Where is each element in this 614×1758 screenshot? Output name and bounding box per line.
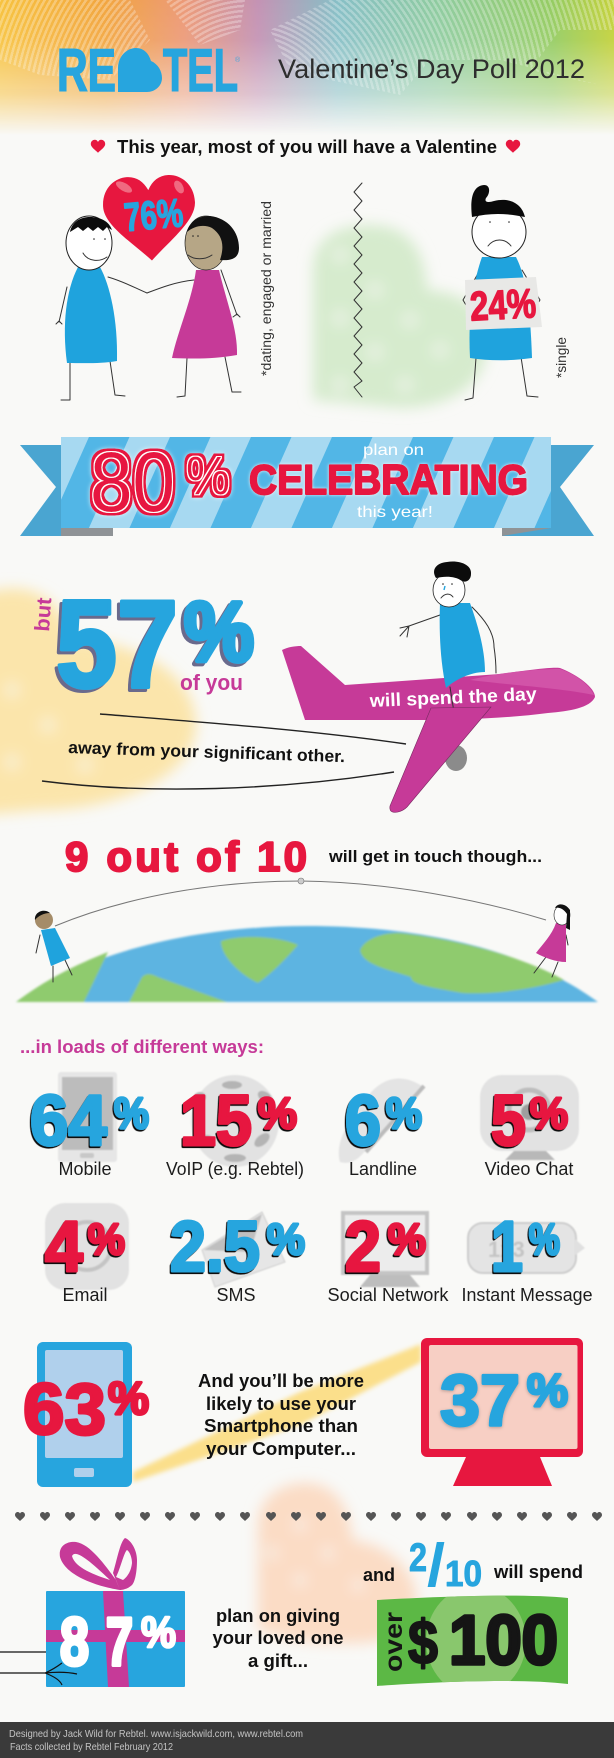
heart dotted divider: [15, 1512, 602, 1521]
wing: [390, 707, 491, 812]
heart with 76%: [102, 174, 198, 263]
stat: sms: 2.5: [170, 1208, 260, 1287]
icon: film reel: [191, 1075, 279, 1167]
smartphone with 63%: [23, 1342, 149, 1487]
87%: 7: [106, 1604, 133, 1680]
but: but: [31, 597, 56, 632]
globe: [16, 926, 598, 1002]
note: dating, engaged or married: *dating, engaged or married: [259, 201, 274, 376]
Rebtel logo: [57, 37, 241, 104]
stat: sms: [170, 1208, 305, 1305]
smartphone vs computer text: Smartphone than: [204, 1415, 358, 1436]
right small person: [534, 904, 570, 977]
sad single man with 24% sign: [463, 185, 542, 400]
57%: [56, 576, 254, 714]
stat: landline: %: [386, 1089, 422, 1138]
stat: landline: [339, 1078, 424, 1179]
yellow beam between phone and computer: [133, 1344, 421, 1482]
stat: social network: [328, 1208, 450, 1305]
banknote over $100: over: [380, 1612, 408, 1672]
stat: video chat: %: [530, 1089, 568, 1138]
Rebtel logo: RE: [57, 37, 116, 104]
stat: voip: 15: [180, 1082, 252, 1161]
computer with 37%: [421, 1338, 583, 1486]
stat: email: [45, 1203, 129, 1305]
gift with 87%: [0, 1538, 185, 1687]
smartphone with 63%: 63: [23, 1370, 106, 1450]
away from your significant other: away from your significant other.: [68, 738, 345, 766]
will spend the day: will spend the day: [368, 683, 538, 711]
80%: [90, 435, 230, 529]
computer with 37%: 37: [440, 1361, 520, 1441]
stat: voip: %: [258, 1089, 297, 1138]
smartphone vs computer text: And you’ll be more: [198, 1370, 364, 1391]
man: [400, 562, 496, 725]
icon: phone: [58, 1072, 117, 1162]
header rainbow background: [0, 0, 614, 135]
box: [46, 1591, 185, 1687]
and 2/10 will spend: will spend: [493, 1561, 583, 1582]
stat: email: 4: [45, 1208, 83, 1287]
section heading with hearts: This year, most of you will have a Valentine: [117, 137, 497, 157]
motion lines: [42, 714, 406, 789]
tin-can string between people: [55, 878, 546, 926]
footer: Facts collected by Rebtel February 2012: [10, 1741, 173, 1753]
fuselage: [282, 646, 595, 720]
peach blurred heart: [258, 1483, 417, 1643]
yellow blurred heart: [0, 589, 196, 815]
stat: email: Email: [62, 1285, 108, 1305]
icon: monitor: [341, 1211, 429, 1287]
stat: social network: %: [388, 1215, 426, 1264]
banner: 80% plan on celebrating: [20, 435, 594, 536]
Rebtel logo: ®: [235, 56, 241, 64]
left small person: [35, 911, 72, 982]
this year: this year!: [357, 504, 433, 521]
banknote over $100: $: [408, 1609, 438, 1678]
stat: voip: VoIP (e.g. Rebtel): [166, 1159, 304, 1179]
smartphone vs computer text: [198, 1370, 364, 1459]
plan on giving text: a gift...: [248, 1650, 308, 1671]
87%: [60, 1604, 176, 1680]
plan on giving text: plan on giving: [216, 1605, 340, 1626]
man: [56, 216, 147, 400]
smartphone vs computer text: your Computer...: [206, 1438, 356, 1459]
of you: of you: [180, 670, 243, 695]
stat: mobile: Mobile: [58, 1159, 112, 1179]
icon: speech bubble: 1x3: [488, 1237, 525, 1262]
57%: %: [184, 585, 254, 679]
stat: mobile: 64: [30, 1082, 107, 1161]
note: single: *single: [554, 337, 569, 378]
icon: webcam: [480, 1075, 579, 1160]
stat: landline: 6: [345, 1082, 381, 1161]
stat: mobile: %: [114, 1089, 149, 1138]
couple illustration: [56, 174, 241, 400]
ribbon tails: [20, 445, 594, 536]
stat: social network: Social Network: [328, 1285, 450, 1305]
stat: voip: [166, 1075, 304, 1179]
80%: 80: [90, 435, 175, 529]
green blurred heart: [313, 225, 487, 408]
and 2/10 will spend: /: [427, 1532, 445, 1599]
stat: instant message: 1: [491, 1208, 523, 1287]
87%: %: [141, 1608, 176, 1657]
footer: [0, 1722, 614, 1758]
stat: social network: 2: [345, 1208, 381, 1287]
in loads of different ways: ...in loads of different ways:: [20, 1037, 264, 1057]
and 2/10 will spend: 2: [409, 1536, 427, 1580]
57%: 57: [56, 576, 178, 714]
stat: landline: Landline: [349, 1159, 417, 1179]
9 out of 10: 9 out of 10: [65, 833, 307, 880]
stat: sms: SMS: [216, 1285, 256, 1305]
87%: 8: [60, 1604, 89, 1680]
zigzag divider: [354, 183, 362, 397]
Rebtel logo: TEL: [163, 37, 238, 104]
heart with 76%: 76%: [122, 191, 185, 240]
icon: handset: [339, 1078, 424, 1163]
stat: instant message: [462, 1208, 592, 1305]
and 2/10 will spend: and: [363, 1564, 395, 1585]
computer with 37%: %: [527, 1364, 568, 1416]
banknote over $100: [377, 1596, 568, 1686]
and 2/10 will spend: 10: [445, 1553, 482, 1594]
sign: 24%: [469, 280, 537, 330]
will get in touch though: will get in touch though...: [328, 847, 542, 866]
footer: Designed by Jack Wild for Rebtel. www.isjackwild.com, www.rebtel.com: [9, 1728, 303, 1740]
stat: video chat: [480, 1075, 579, 1179]
bow: [60, 1538, 137, 1590]
stat: email: %: [88, 1215, 125, 1264]
plan on giving text: your loved one: [212, 1627, 344, 1648]
stat: video chat: Video Chat: [485, 1159, 573, 1179]
80%: %: [186, 446, 230, 506]
icon: envelope: [202, 1212, 285, 1287]
celebrating: CELEBRATING: [249, 456, 528, 503]
smartphone vs computer text: likely to use your: [206, 1393, 356, 1414]
and 2/10 will spend: [363, 1532, 583, 1599]
engine: [445, 745, 467, 771]
title: Valentine’s Day Poll 2012: [278, 54, 585, 84]
man riding plane: [282, 562, 595, 812]
stat: mobile: [30, 1072, 149, 1179]
banknote over $100: 100: [449, 1601, 558, 1679]
smartphone with 63%: %: [108, 1372, 149, 1424]
icon: at sign tile: [45, 1203, 129, 1290]
stat: instant message: %: [529, 1215, 560, 1264]
stat: instant message: Instant Message: [462, 1285, 592, 1305]
stat: video chat: 5: [491, 1082, 526, 1161]
hand holding string: [0, 1652, 77, 1685]
stat: sms: %: [267, 1215, 305, 1264]
plan on giving text: [212, 1605, 344, 1671]
woman: [147, 216, 241, 397]
plan on: plan on: [363, 442, 424, 459]
